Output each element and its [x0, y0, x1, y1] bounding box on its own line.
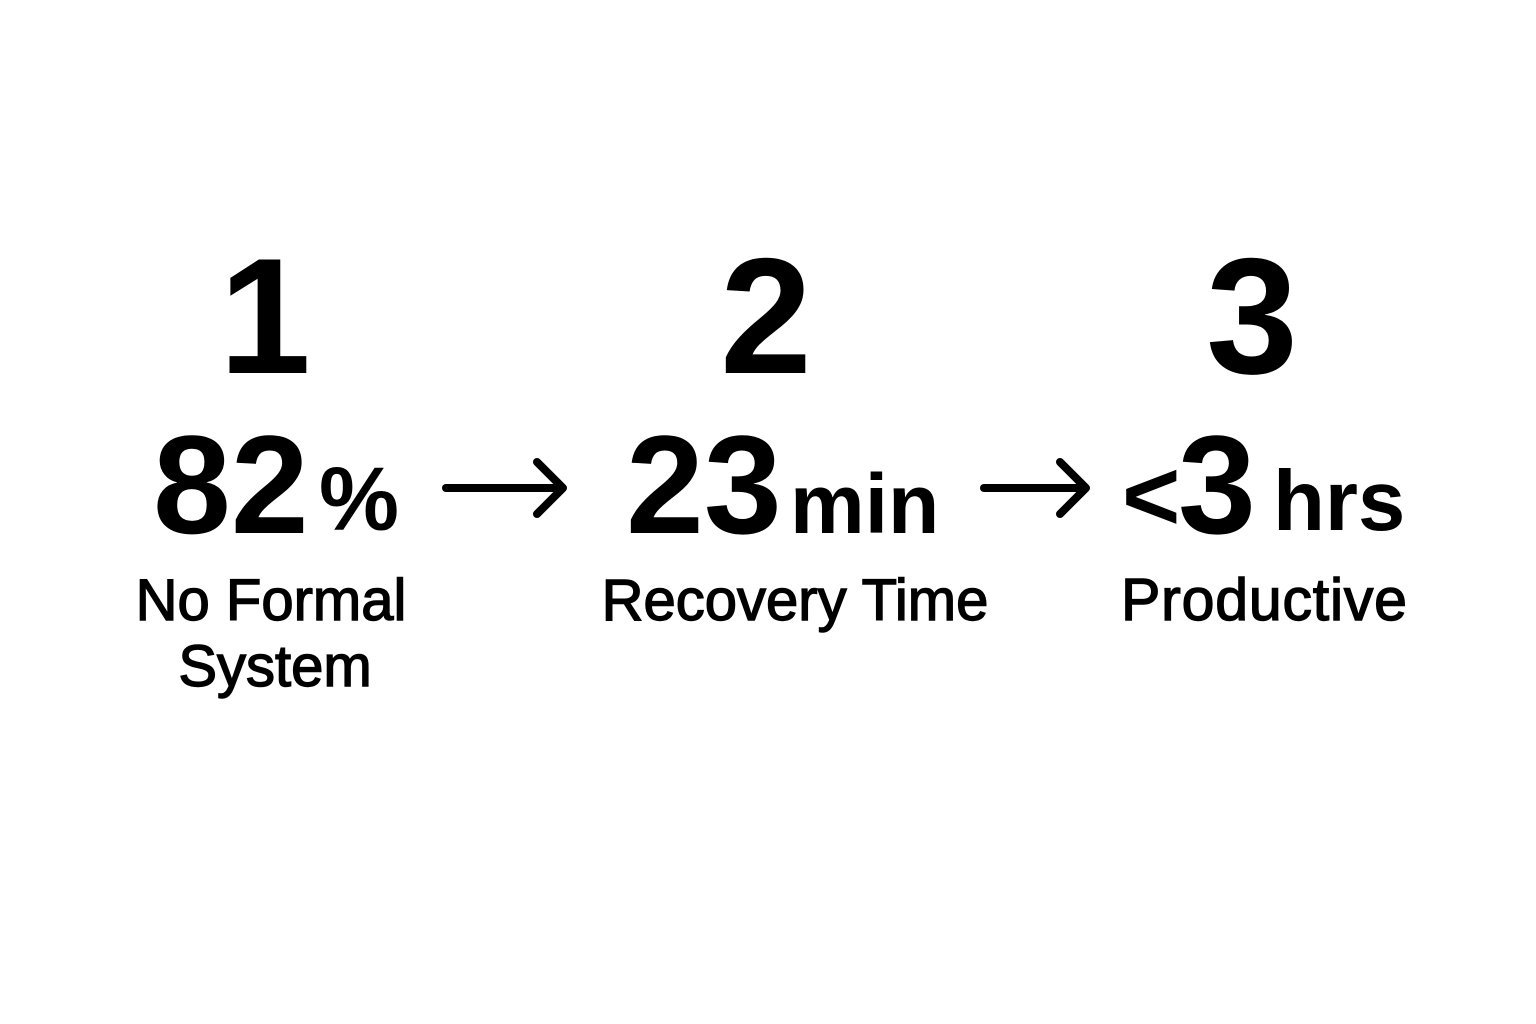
step 2 column	[602, 224, 988, 633]
arrow 2	[984, 462, 1086, 514]
label: No Formal System: System	[178, 634, 372, 699]
stat <3 hrs: hrs	[1273, 454, 1405, 549]
step number 1: 1	[219, 224, 311, 408]
stat 82%: 82	[153, 406, 309, 563]
stat <3 hrs	[1122, 406, 1405, 563]
stat 82%	[153, 406, 399, 563]
label: Recovery Time: Recovery Time	[602, 568, 988, 633]
step number 2: 2	[720, 224, 812, 408]
label: Productive: Productive	[1121, 567, 1407, 633]
stat <3 hrs: 3	[1178, 406, 1256, 563]
step number 3: 3	[1206, 224, 1298, 408]
stat <3 hrs: <	[1122, 440, 1180, 552]
arrow 1	[446, 462, 563, 514]
stat 82%: %	[319, 450, 399, 550]
label: No Formal System: No Formal	[136, 568, 406, 633]
label: No Formal System	[136, 568, 406, 699]
step 3 column	[1121, 224, 1407, 633]
stat 23min	[626, 406, 939, 563]
stat 23min: min	[790, 457, 939, 551]
stat 23min: 23	[626, 406, 782, 563]
step 1 column	[136, 224, 406, 699]
